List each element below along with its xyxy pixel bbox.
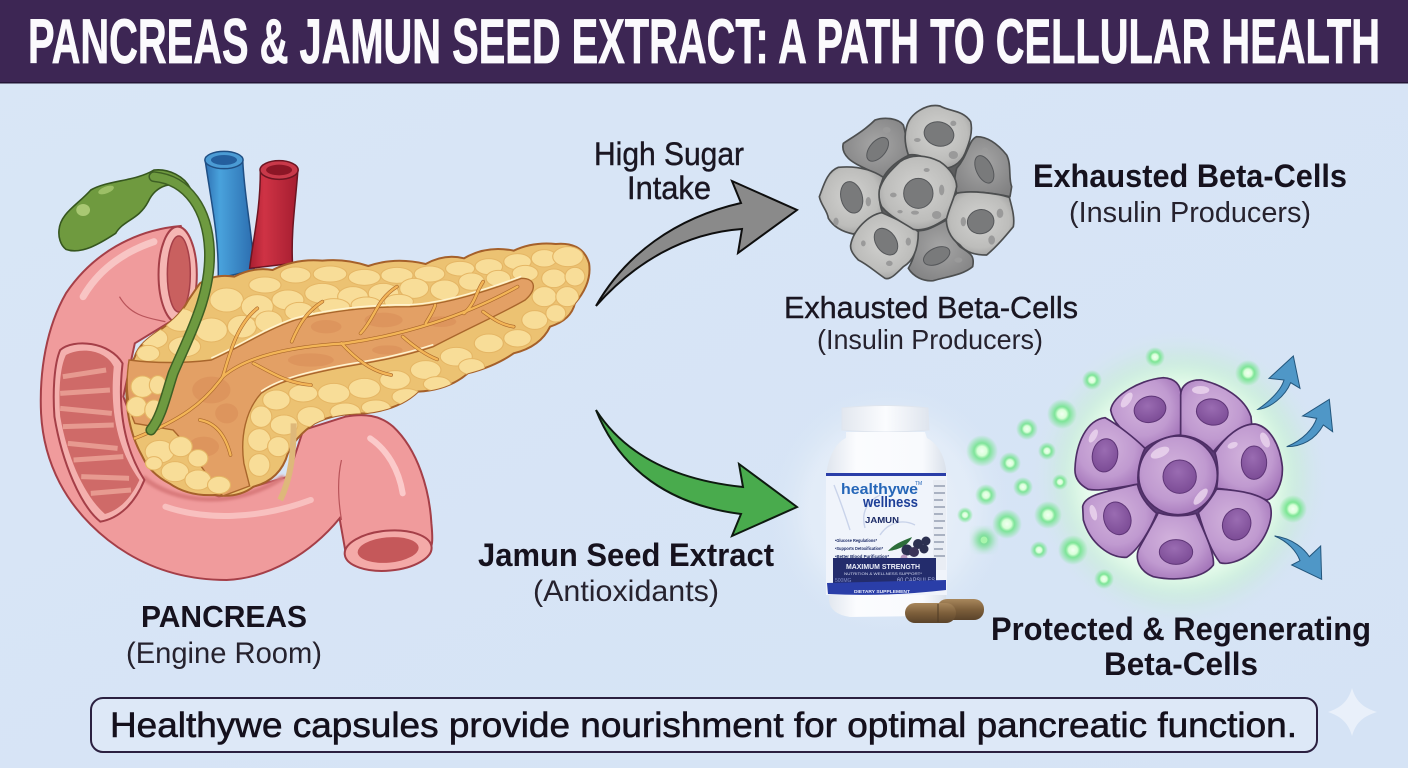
purple cell highlights: [1087, 386, 1272, 521]
duodenum: [41, 226, 434, 580]
label: exhausted beta-cells, below: Exhausted Beta-Cells: [784, 290, 1078, 325]
capsules: [905, 599, 984, 623]
gray cell spots: [833, 121, 1003, 266]
green antioxidant particles: [957, 347, 1307, 589]
bottle label: wellness: [862, 495, 918, 511]
purple cell backing: [1106, 405, 1250, 548]
bottle halo: [770, 385, 1010, 635]
bottle label: healthywe: [841, 482, 918, 498]
illustration: healthywe supplement bottle: [826, 406, 984, 623]
label: exhausted beta-cells, below: (Insulin Producers): [817, 324, 1043, 355]
bottle label: •Glucose Regulations*: [835, 538, 877, 543]
pancreas head lobules: [127, 376, 230, 494]
illustration: pancreas and duodenum: [41, 151, 590, 580]
label: exhausted beta-cells, right: (Insulin Producers): [1069, 197, 1311, 229]
bottle label: NUTRITION & WELLNESS SUPPORT*: [844, 572, 923, 576]
icon: sparkle: [1328, 688, 1377, 736]
bottle label: [826, 473, 947, 595]
gray cell membranes: [819, 106, 1014, 281]
label: exhausted beta-cells, right: Exhausted Beta-Cells: [1033, 158, 1347, 194]
pancreas label: PANCREAS: [141, 599, 307, 634]
bottle label: 60 CAPSULES: [897, 577, 935, 584]
bottle label: •Supports Detoxification*: [835, 546, 883, 551]
arrow: high sugar, gray: [596, 181, 797, 306]
icon: gallbladder and bile duct: [59, 170, 210, 430]
label: jamun seed extract: Jamun Seed Extract: [478, 537, 774, 573]
purple cell nuclei: [1090, 393, 1267, 564]
illustration: exhausted gray cell cluster: [819, 106, 1014, 281]
purple cell membranes: [1075, 378, 1282, 579]
duodenum upper opening: [159, 227, 197, 323]
pancreas body: [126, 244, 590, 500]
bottle label: TM: [915, 481, 922, 487]
pancreas lobules: [137, 247, 585, 476]
pancreas channel texture: [188, 313, 456, 457]
label: high sugar intake: Intake: [627, 170, 711, 206]
bottle label: 500MG: [835, 578, 852, 584]
pancreas label: [126, 599, 322, 670]
icon: blue vein: [205, 151, 254, 278]
label: protected and regenerating beta-cells: Protected & Regenerating: [991, 611, 1371, 647]
pancreatic ducts: [135, 282, 518, 455]
bottle label: MAXIMUM STRENGTH: [846, 564, 920, 571]
label: high sugar intake: High Sugar: [594, 136, 744, 172]
duodenum cut-away wall: [54, 343, 144, 522]
bottle body: [826, 432, 947, 617]
arrow: jamun seed extract, green: [596, 410, 797, 536]
duodenum lower opening: [342, 527, 434, 575]
icon: red artery: [250, 161, 298, 268]
callout: healthywe capsules: Healthywe capsules provide nourishment for optimal pancreatic function.: [110, 706, 1297, 745]
bottle label: •Better Blood Purification*: [835, 554, 889, 559]
pancreas label: (Engine Room): [126, 637, 322, 670]
icon: blue arrows out of cells: [1258, 356, 1333, 579]
label: jamun seed extract: (Antioxidants): [533, 575, 719, 608]
label: protected and regenerating beta-cells: [991, 611, 1371, 682]
label: exhausted beta-cells, right: [1033, 158, 1347, 229]
label: jamun seed extract: [478, 537, 774, 608]
glow: regeneration halo: [1030, 328, 1330, 628]
pancreas main duct channel: [127, 278, 533, 496]
callout: healthywe capsules: [91, 698, 1317, 752]
illustration: protected purple cell cluster: [1075, 378, 1282, 579]
bottle label: DIETARY SUPPLEMENT: [854, 589, 910, 594]
jamun berries: [888, 536, 930, 562]
label: exhausted beta-cells, below: [784, 290, 1078, 355]
label: protected and regenerating beta-cells: Beta-Cells: [1104, 646, 1258, 682]
gray cell nuclei: [837, 119, 998, 269]
gray cell backing: [862, 138, 972, 248]
label: high sugar intake: [594, 136, 744, 206]
bottle cap: [842, 406, 929, 432]
bottle label: JAMUN: [865, 515, 899, 525]
